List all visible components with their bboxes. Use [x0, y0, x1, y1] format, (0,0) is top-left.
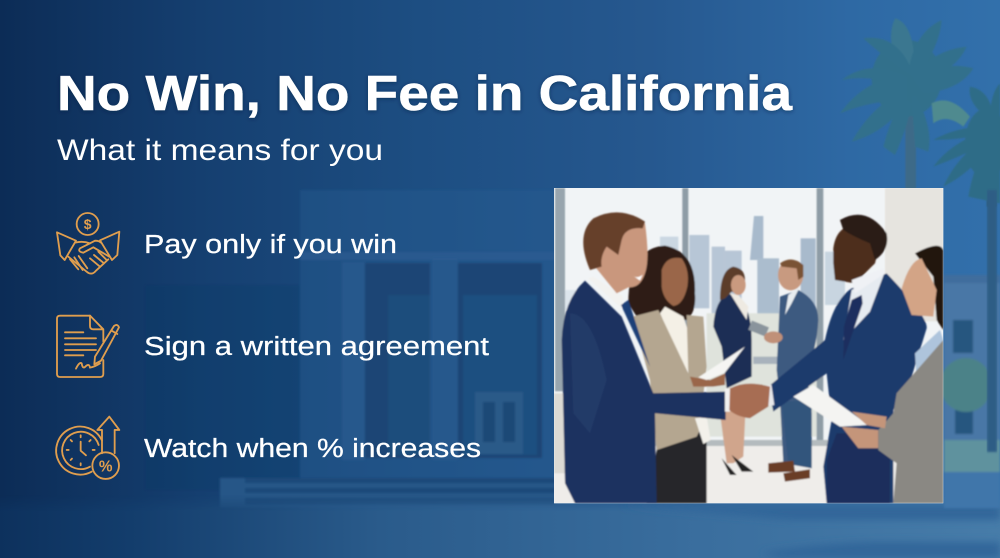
photo: background woman — [713, 293, 752, 388]
photo: man on left — [562, 281, 726, 503]
photo: skyline — [565, 216, 845, 437]
title: No Win, No Fee in California — [57, 67, 793, 121]
icon: handshake with dollar coin: $ — [84, 216, 92, 232]
icon: clock with percent and up arrow — [56, 417, 119, 479]
list item: sign a written agreement: Sign a written agreement — [144, 333, 489, 361]
photo: background man — [777, 290, 818, 468]
palm tree one — [840, 18, 973, 190]
list item: pay only if you win: Pay only if you win — [144, 231, 397, 259]
list item: watch when percent increases: Watch when % increases — [144, 435, 481, 463]
icon: contract with pen — [57, 316, 119, 377]
photo: woman with curly hair — [628, 246, 695, 320]
photo: business people shaking hands — [554, 188, 943, 503]
background: lower band — [220, 500, 1000, 558]
background: ground shadows — [620, 505, 1000, 558]
subtitle: What it means for you — [57, 134, 383, 167]
palm tree two lower trunk — [987, 190, 997, 452]
background: palm trees — [840, 18, 1000, 207]
photo: man on right — [768, 273, 927, 503]
photo: handshake — [729, 384, 770, 418]
photo: floor — [554, 446, 896, 504]
icon: handshake with dollar coin — [57, 213, 119, 274]
background: right building and shrubs — [940, 275, 1000, 508]
palm tree two — [933, 83, 1000, 207]
background: courthouse building — [145, 190, 555, 510]
photo: window frames — [555, 188, 565, 391]
photo: woman on right — [793, 385, 868, 427]
icon: clock with percent and up arrow: % — [99, 458, 113, 475]
